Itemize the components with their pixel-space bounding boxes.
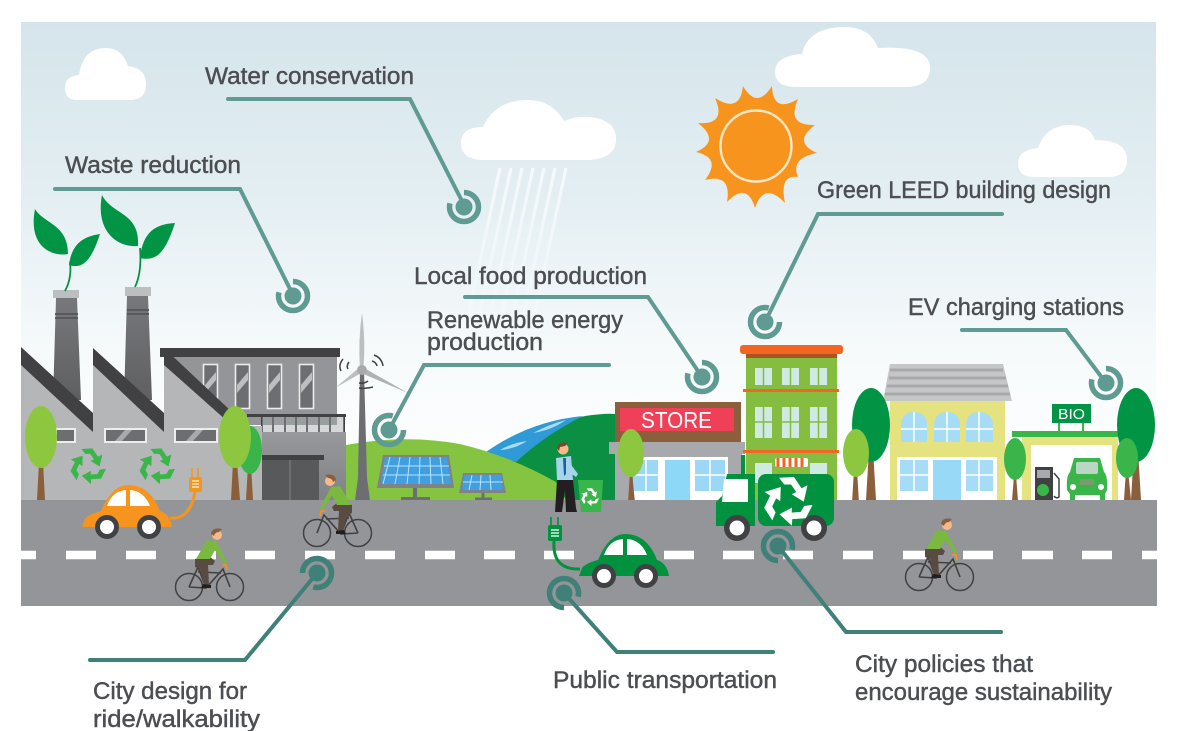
cloud top left [65,48,146,100]
label: encourage sustainability [855,679,1112,706]
callout: green LEED building design [750,177,1111,336]
leader line [765,214,1002,322]
blue water hill [486,416,583,462]
label: Water conservation [205,63,414,90]
station tree [1012,475,1018,501]
person [555,443,578,512]
small panel [459,473,506,499]
store sign [615,402,741,443]
solar panels [377,455,506,499]
rain streaks [462,168,566,345]
label: Local food production [414,263,647,290]
store front [615,450,742,500]
grey roof [883,364,1012,401]
ground floor [897,457,997,500]
leader line [90,573,317,660]
road [21,500,1157,606]
marker [302,558,332,588]
charging cable and plug [170,468,202,518]
garage door [262,460,319,500]
label: Renewable energy [427,307,623,334]
callout: waste reduction [55,152,308,310]
marker [688,362,716,392]
marker [278,282,308,310]
icon: wind turbine [335,313,408,500]
leader line [564,593,773,652]
leader line [465,297,702,377]
trees by station [1004,388,1155,500]
cloud far right [1018,125,1127,177]
recycling truck [716,455,834,541]
leader line [389,365,609,430]
fuel pump [1035,467,1059,500]
sky background [21,22,1156,502]
BIO sign [1052,404,1091,423]
yellow house [883,364,1012,500]
callout: city design for ride/walkability [90,558,332,731]
recycling symbol [757,477,813,530]
person with recycling bin [555,443,603,512]
marker [764,532,792,560]
callout: city policies [764,532,1112,706]
trees by house [843,388,890,503]
label: Public transportation [553,667,777,694]
hills [346,414,616,500]
chimneys [53,287,152,400]
rain cloud [461,100,616,160]
store [609,402,745,503]
store tree [628,472,635,503]
label: production [427,329,543,356]
recycling sign second shed [135,448,176,487]
cyclist lower left [176,529,244,600]
label: EV charging stations [908,294,1124,321]
leader line [55,189,293,295]
marker [450,192,478,222]
orange electric car [82,468,202,539]
light green hill [346,439,566,500]
EV charging station [1012,404,1118,501]
charging cable and plug [548,517,580,569]
trees by factory [25,406,262,500]
label: City design for [93,678,247,705]
label: Green LEED building design [817,177,1111,204]
large panel [377,455,454,499]
label [93,678,260,731]
label: Waste reduction [65,152,241,179]
store: STORE [641,407,712,433]
label: City policies that [855,651,1033,678]
marker [1092,368,1120,398]
green car [1067,458,1107,500]
cyclist upper left [304,475,372,546]
callout: water conservation [205,63,478,222]
shed windows [56,429,217,442]
green apartment building [740,345,843,500]
green electric car [548,517,669,588]
leaves on chimneys [34,195,175,291]
label [427,307,623,356]
recycling bin [578,480,603,512]
dark green hill [510,414,616,500]
callout: EV charging stations [908,294,1124,398]
marker [550,578,578,608]
callout: renewable energy production [374,307,623,444]
callout: public transportation [550,578,777,694]
leader line [778,546,1001,632]
rain cloud with rain [461,100,616,345]
cloud top right [775,27,930,87]
marker [374,416,404,444]
awning [775,458,808,467]
leader line [228,99,464,205]
upper windows [204,364,314,408]
icon: sun [696,86,817,208]
rear office building [160,348,346,500]
leader line [962,330,1106,383]
saw-tooth sheds [21,347,262,500]
marker [750,308,780,336]
EV charging station: BIO [1058,406,1085,423]
callout: local food production [414,263,716,392]
label [855,651,1112,706]
windows [755,368,827,483]
recycling signs on shed [66,448,107,487]
arched windows [901,412,993,442]
cyclist right [906,519,974,590]
